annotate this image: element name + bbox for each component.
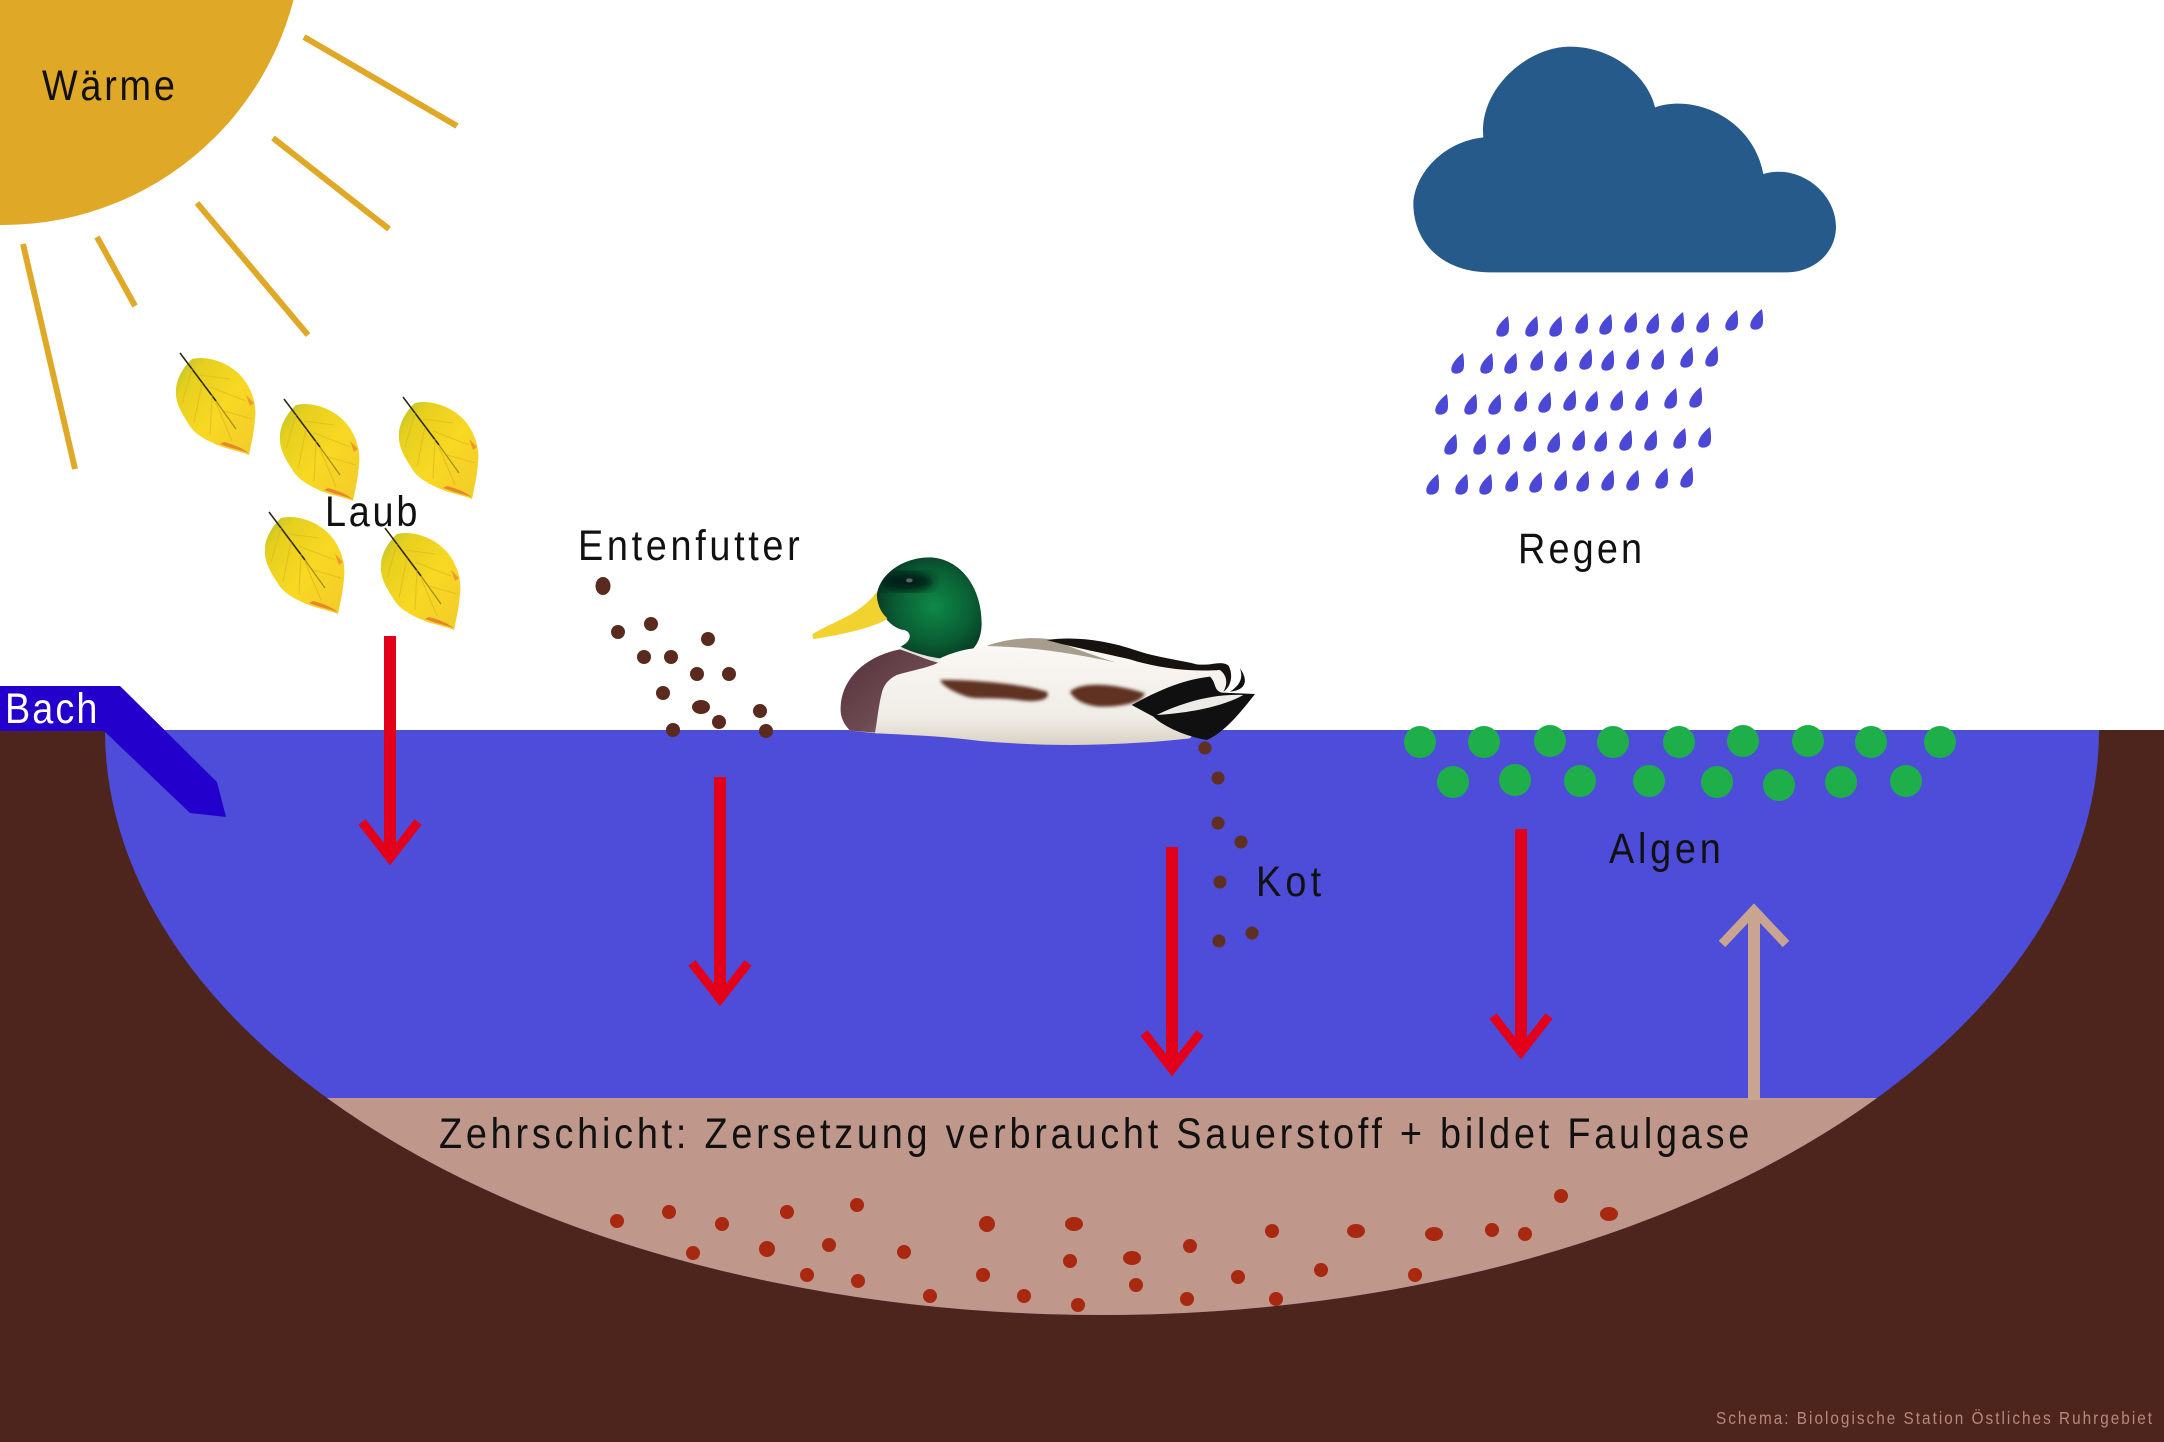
label: Algen: Algen [1609, 824, 1721, 873]
duck breast [841, 649, 938, 733]
label: Bach: Bach [5, 684, 97, 733]
duck tail white stripe [1157, 695, 1243, 715]
arrow: algae down [1493, 829, 1549, 1052]
background sky [0, 0, 2164, 730]
credit line: Schema: Biologische Station Östliches Ruhrgebiet [1716, 1408, 2152, 1428]
label: Zehrschicht: Zehrschicht: Zersetzung verbraucht Sauerstoff + bildet Faulgase [439, 1109, 1749, 1158]
label: Regen: Regen [1518, 524, 1642, 573]
duck eye stripe [880, 572, 933, 591]
Zehrschicht sediment layer [327, 1098, 1877, 1315]
duck body [841, 640, 1227, 745]
duck head [877, 557, 982, 658]
label: Kot: Kot [1256, 857, 1321, 906]
duck bill [812, 592, 887, 639]
rain drops [1426, 309, 1763, 495]
duck tail curl [1230, 668, 1245, 692]
algae [1404, 725, 1956, 801]
duck droppings [1198, 742, 1258, 948]
stream inflow [0, 686, 226, 817]
label: Entenfutter: Entenfutter [578, 521, 800, 570]
duck neck collar [900, 647, 940, 662]
ground [0, 730, 2164, 1442]
sediment particles [610, 1189, 1618, 1312]
duck back feathers [987, 638, 1117, 663]
duck wing stripe [1047, 638, 1231, 692]
duck [812, 557, 1255, 745]
label: Laub: Laub [325, 487, 417, 536]
label: Wärme: Wärme [42, 61, 175, 110]
duck eye [906, 578, 913, 582]
duck flank stripes [940, 680, 1145, 707]
arrow: leaves down [362, 636, 418, 858]
cloud [1413, 47, 1836, 272]
sun [0, 0, 457, 469]
leaves [176, 353, 478, 630]
duck tail [1132, 677, 1255, 740]
arrow: feed down [692, 777, 748, 999]
pond water [105, 730, 2099, 1315]
arrow: droppings down [1144, 847, 1200, 1069]
duck feed pellets [596, 577, 773, 738]
arrow: up from sediment [1722, 910, 1786, 1100]
